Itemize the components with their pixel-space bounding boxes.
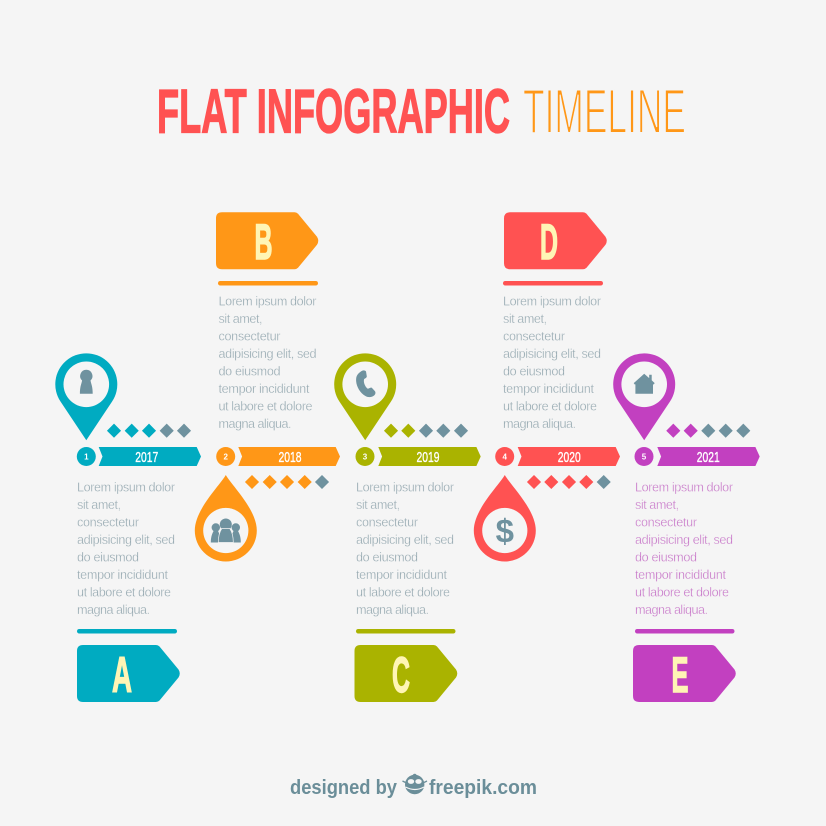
timeline marker 2020: [495, 447, 620, 466]
rule and tag B: [216, 212, 318, 286]
text block D: sit amet,: [503, 312, 547, 326]
diamonds A: [108, 425, 190, 437]
text block C: sit amet,: [356, 498, 400, 512]
diamonds B: [246, 476, 328, 488]
text block D: adipisicing elit, sed: [503, 347, 601, 361]
timeline marker 2020: 2020: [558, 449, 581, 466]
title: TIMELINE: [523, 77, 686, 147]
diamonds C: [385, 425, 467, 437]
timeline marker 2019: [356, 447, 481, 466]
text block D: ut labore et dolore: [503, 400, 597, 414]
text block A: do eiusmod: [77, 550, 139, 564]
diamonds D: [528, 476, 610, 488]
text block C: do eiusmod: [356, 550, 418, 564]
text block E: tempor incididunt: [635, 568, 726, 582]
timeline marker 2018: 2: [223, 452, 228, 461]
text block E: adipisicing elit, sed: [635, 533, 733, 547]
rule and tag C: C: [392, 647, 410, 703]
pin A: keyhole: [55, 353, 117, 440]
text block E: consectetur: [635, 516, 697, 530]
timeline marker 2018: [216, 447, 340, 466]
timeline marker 2018: 2018: [278, 449, 302, 466]
rule and tag E: E: [672, 647, 688, 703]
pin C: phone: [334, 353, 396, 440]
timeline marker 2017: [77, 447, 201, 466]
text block A: magna aliqua.: [77, 603, 150, 617]
timeline marker 2019: 2019: [416, 449, 440, 466]
rule and tag B: B: [254, 214, 272, 270]
text block C: [356, 480, 454, 617]
text block C: magna aliqua.: [356, 603, 429, 617]
title: FLAT INFOGRAPHIC: [157, 78, 510, 146]
text block D: Lorem ipsum dolor: [503, 294, 601, 308]
footer credit: designed by: [290, 776, 398, 799]
timeline marker 2021: 5: [642, 452, 647, 461]
text block C: Lorem ipsum dolor: [356, 480, 454, 494]
rule and tag A: A: [112, 647, 132, 703]
timeline marker 2019: 3: [363, 452, 368, 461]
text block C: ut labore et dolore: [356, 586, 450, 600]
text block B: do eiusmod: [218, 364, 280, 378]
text block B: sit amet,: [218, 312, 262, 326]
footer credit: freepik.com: [429, 776, 537, 799]
rule and tag D: D: [540, 214, 558, 270]
text block E: magna aliqua.: [635, 603, 708, 617]
drop D: dollar: $: [496, 512, 514, 550]
text block C: consectetur: [356, 516, 418, 530]
text block D: consectetur: [503, 330, 565, 344]
pin E: house: [613, 353, 675, 440]
drop D: dollar: [474, 475, 536, 562]
icon: freepik mascot: [402, 774, 427, 794]
timeline marker 2020: 4: [502, 452, 507, 461]
text block B: magna aliqua.: [218, 417, 292, 431]
drop B: people: [195, 475, 257, 562]
text block E: ut labore et dolore: [635, 586, 729, 600]
text block A: consectetur: [77, 516, 139, 530]
text block C: adipisicing elit, sed: [356, 533, 454, 547]
text block A: [77, 480, 175, 617]
timeline marker 2017: 2017: [135, 449, 158, 466]
text block B: [218, 294, 316, 431]
timeline marker 2017: 1: [84, 452, 89, 461]
text block A: adipisicing elit, sed: [77, 533, 175, 547]
text block E: [635, 480, 733, 617]
text block A: tempor incididunt: [77, 568, 168, 582]
text block A: ut labore et dolore: [77, 586, 171, 600]
text block E: sit amet,: [635, 498, 679, 512]
text block A: Lorem ipsum dolor: [77, 480, 175, 494]
timeline marker 2021: 2021: [697, 449, 720, 466]
text block D: [503, 294, 601, 431]
text block A: sit amet,: [77, 498, 121, 512]
text block B: adipisicing elit, sed: [218, 347, 316, 361]
text block B: Lorem ipsum dolor: [218, 294, 316, 308]
text block D: tempor incididunt: [503, 382, 594, 396]
rule and tag A: [77, 629, 180, 703]
text block D: magna aliqua.: [503, 417, 576, 431]
diamonds E: [667, 425, 749, 437]
text block E: do eiusmod: [635, 550, 697, 564]
rule and tag C: [354, 629, 457, 703]
text block B: tempor incididunt: [218, 382, 310, 396]
text block D: do eiusmod: [503, 364, 565, 378]
rule and tag D: [503, 212, 607, 286]
footer credit: [290, 774, 537, 799]
timeline marker 2021: [634, 447, 760, 466]
text block C: tempor incididunt: [356, 568, 448, 582]
text block E: Lorem ipsum dolor: [635, 480, 733, 494]
text block B: ut labore et dolore: [218, 400, 312, 414]
text block B: consectetur: [218, 330, 280, 344]
rule and tag E: [633, 629, 736, 703]
